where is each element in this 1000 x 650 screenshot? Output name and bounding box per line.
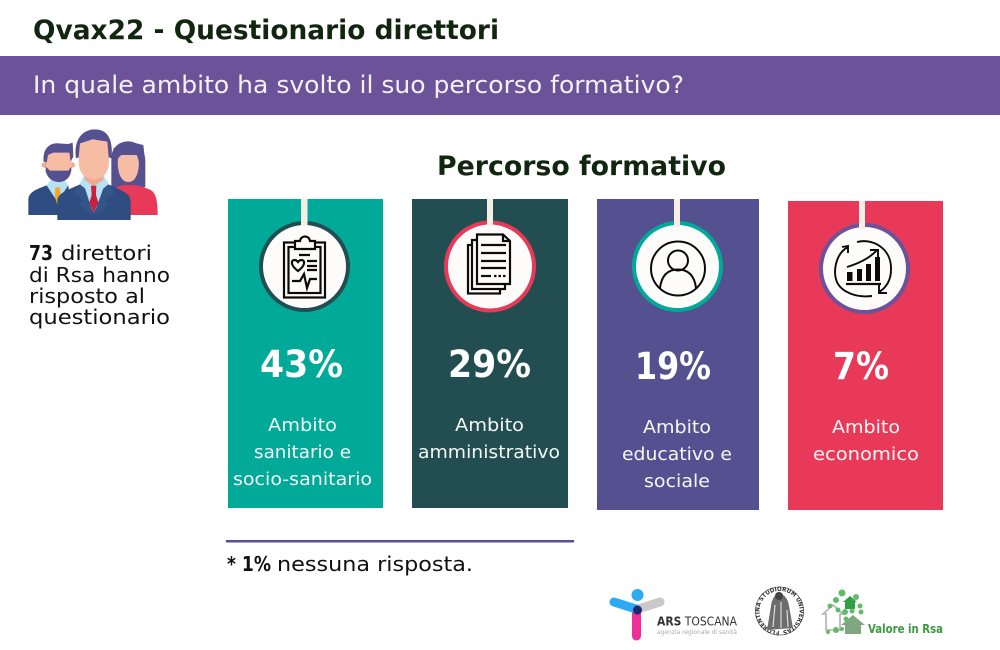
text: respondents — [29, 241, 170, 329]
panel: ambito amministrativo — [412, 199, 568, 508]
value: 29%: 29% — [448, 343, 531, 386]
label: ambito economico: Ambito — [832, 417, 900, 438]
value: 43%: 43% — [260, 343, 343, 386]
label: ambito educativo — [622, 417, 732, 492]
logo: university seal: FLORENTINA STUDIORUM UNIVERSITAS — [755, 586, 804, 636]
label: ambito sanitario: socio-sanitario — [233, 469, 372, 490]
text: respondents: direttori — [61, 241, 152, 265]
banner: question: In quale ambito ha svolto il suo percorso formativo? — [33, 71, 684, 99]
footnote: nessuna risposta. — [277, 552, 473, 576]
label: ambito sanitario: Ambito — [268, 415, 337, 436]
label: ambito educativo: sociale — [644, 471, 710, 492]
label: ambito amministrativo: amministrativo — [418, 442, 560, 463]
heading: percorso formativo: Percorso formativo — [437, 151, 726, 182]
footnote: * 1% — [227, 552, 271, 576]
logo: Valore in Rsa — [823, 590, 943, 636]
logo: ARS Toscana: agenzia regionale di sanità — [657, 628, 737, 636]
label: ambito economico: economico — [813, 444, 919, 465]
label: ambito amministrativo — [418, 415, 560, 463]
label: ambito amministrativo: Ambito — [455, 415, 524, 436]
value: 19%: 19% — [635, 345, 711, 388]
text: respondents: di Rsa hanno — [29, 263, 170, 287]
logo: ARS Toscana — [614, 589, 737, 636]
label: ambito sanitario: sanitario e — [254, 442, 351, 463]
title: Qvax22 - Questionario direttori — [33, 15, 499, 46]
text: respondents: risposto al — [29, 284, 145, 308]
label: ambito educativo: educativo e — [622, 444, 732, 465]
logo: ARS Toscana: ARS TOSCANA — [657, 614, 737, 628]
panel: ambito sanitario — [228, 199, 383, 508]
label: ambito sanitario — [233, 415, 372, 490]
icon: growth chart — [821, 201, 908, 312]
icon: group of directors — [28, 129, 158, 220]
banner: question — [0, 56, 1000, 115]
label: ambito educativo: Ambito — [643, 417, 711, 438]
icon: documents — [446, 199, 534, 310]
text: respondents: 73 — [29, 241, 53, 265]
icon: person — [634, 199, 721, 310]
panel: ambito economico — [788, 201, 943, 510]
value: 7%: 7% — [833, 345, 889, 388]
icon: clipboard — [261, 199, 348, 310]
label: ambito economico — [813, 417, 919, 465]
logo: Valore in Rsa: Valore in Rsa — [868, 622, 943, 636]
panel: ambito educativo — [597, 199, 759, 510]
text: respondents: questionario — [29, 305, 170, 329]
